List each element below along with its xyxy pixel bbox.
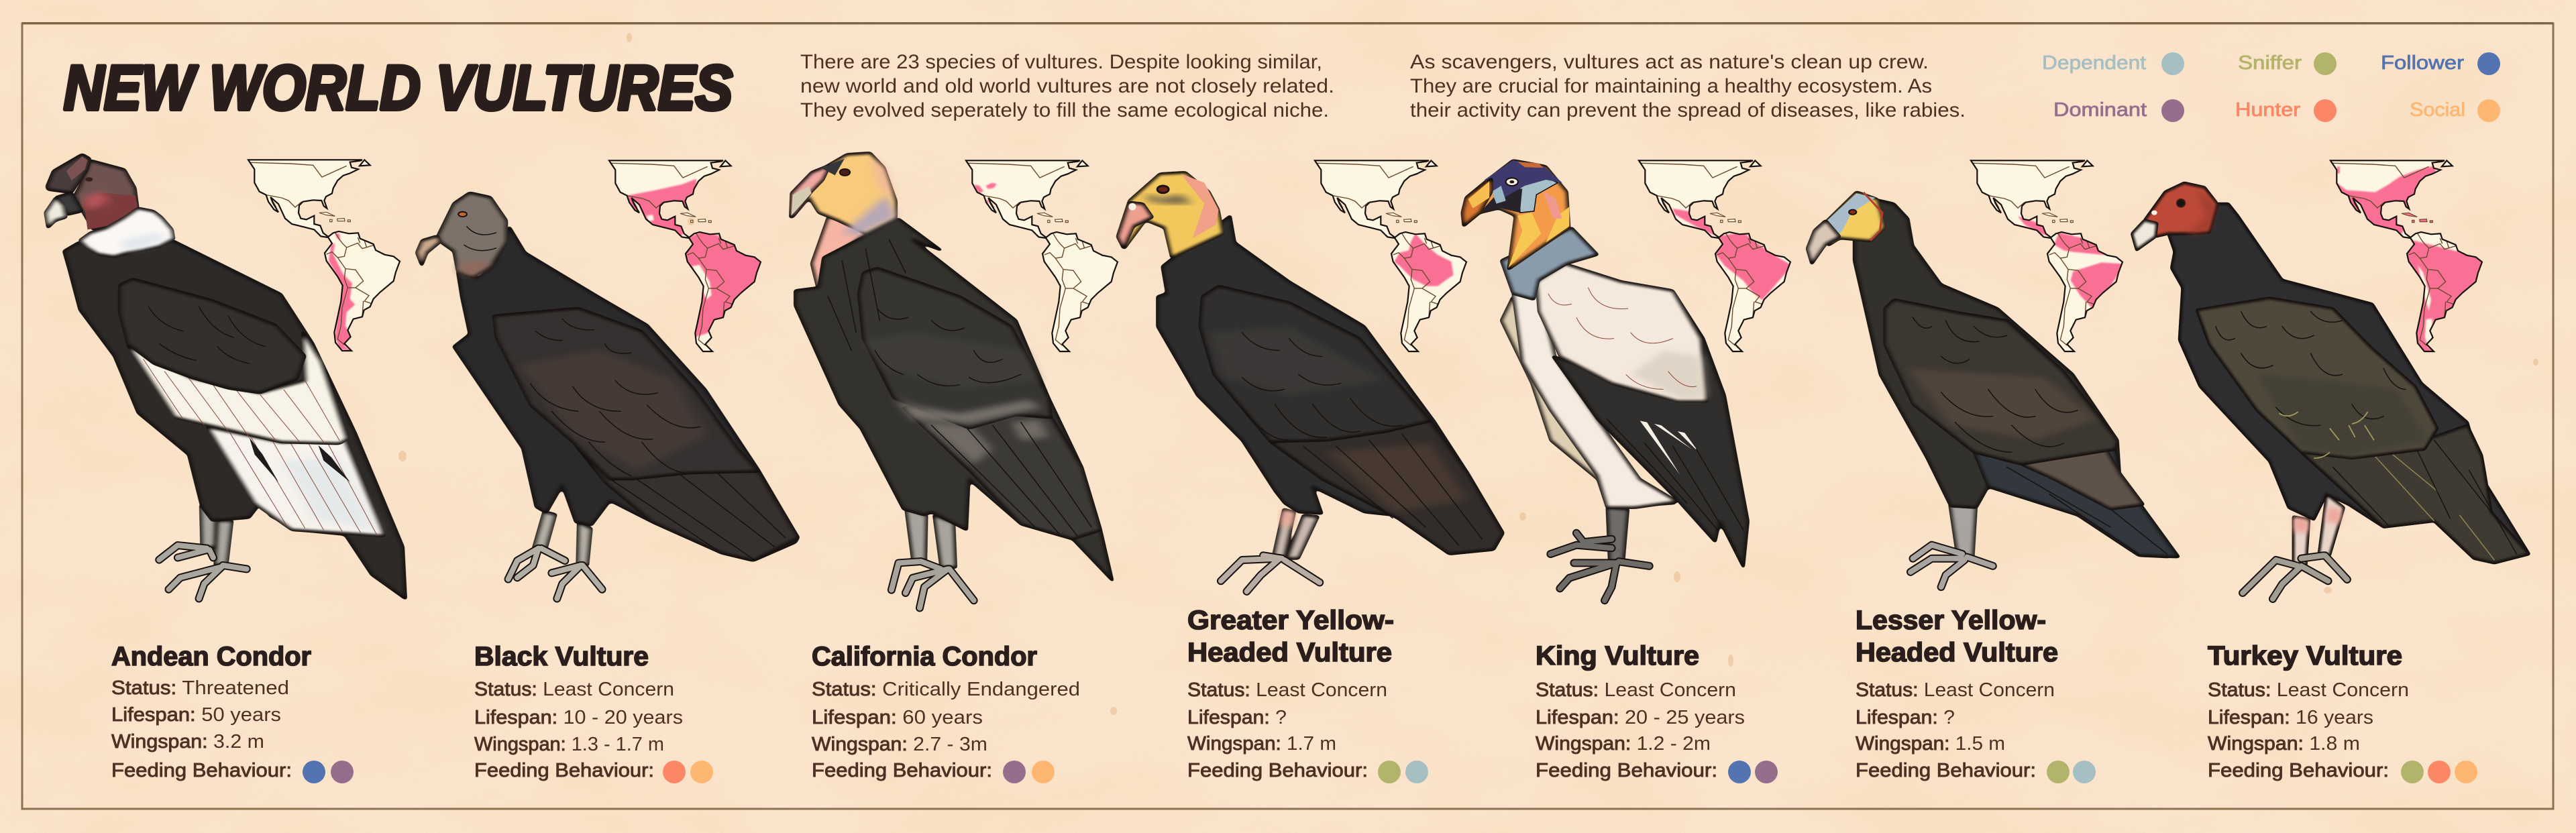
legs and feet	[892, 508, 974, 608]
head	[1807, 192, 1884, 264]
intro text: species: There are 23 species of vultures. Despite looking similar,	[800, 51, 1322, 73]
tan rear feathers	[1501, 296, 1675, 508]
card: California Condor: Status: Critically Endangered	[812, 679, 1080, 700]
card: Turkey Vulture	[2208, 641, 2477, 783]
legend: feeding behaviour: Dominant	[2053, 99, 2147, 121]
wing	[1199, 286, 1430, 442]
primaries	[2301, 425, 2529, 563]
white wing coverts	[1536, 264, 1707, 401]
card: California Condor: Feeding Behaviour:	[812, 760, 992, 781]
card: Greater Yellow-Headed Vulture: Lifespan: ?	[1187, 707, 1287, 728]
card: Andean Condor: Andean Condor	[111, 642, 311, 671]
card: Black Vulture	[474, 642, 713, 783]
card: Greater Yellow-Headed Vulture: Headed Vulture	[1187, 638, 1392, 667]
body silhouette	[1157, 216, 1503, 554]
legend: feeding behaviour	[2042, 52, 2500, 122]
neck quills	[828, 239, 906, 350]
card: Lesser Yellow-Headed Vulture: Lifespan: ?	[1856, 707, 1955, 728]
card: Lesser Yellow-Headed Vulture: Lesser Yellow-	[1856, 606, 2046, 635]
wing	[2197, 298, 2437, 458]
legend: feeding behaviour: Social	[2410, 99, 2465, 121]
title: NEW WORLD VULTURES	[64, 52, 733, 123]
card: Greater Yellow-Headed Vulture: Status: Least Concern	[1187, 679, 1387, 701]
legs and feet	[508, 512, 602, 598]
card: Lesser Yellow-Headed Vulture: Status: Least Concern	[1856, 679, 2055, 701]
legs and feet	[159, 505, 247, 598]
card: California Condor: California Condor	[812, 642, 1037, 671]
illustration: Lesser Yellow-headed Vulture	[1807, 192, 2179, 587]
legs and feet	[2243, 494, 2347, 599]
primaries	[1271, 421, 1503, 554]
illustration: King Vulture	[1462, 160, 1748, 600]
card: King Vulture: Wingspan: 1.2 - 2m	[1536, 733, 1711, 755]
lower white flight feathers	[207, 427, 384, 536]
card: Black Vulture: Black Vulture	[474, 642, 649, 671]
card: Lesser Yellow-Headed Vulture: Feeding Behaviour:	[1856, 760, 2036, 781]
card: King Vulture: Feeding Behaviour:	[1536, 760, 1717, 781]
white neck ruff	[80, 208, 174, 257]
card: Black Vulture: Wingspan: 1.3 - 1.7 m	[474, 734, 664, 755]
card: Lesser Yellow-Headed Vulture: Wingspan: 1.5 m	[1856, 733, 2005, 755]
card: Greater Yellow-Headed Vulture: Wingspan: 1.7 m	[1187, 733, 1336, 755]
intro text: species	[800, 51, 1334, 121]
body silhouette	[64, 240, 406, 599]
card: Turkey Vulture: Feeding Behaviour:	[2208, 760, 2389, 781]
head	[2132, 182, 2217, 250]
card: California Condor: Wingspan: 2.7 - 3m	[812, 734, 987, 755]
card: King Vulture: Lifespan: 20 - 25 years	[1536, 707, 1745, 728]
legend: feeding behaviour: Follower	[2381, 52, 2464, 74]
illustration: California Condor	[790, 153, 1113, 608]
head	[1118, 172, 1223, 258]
wing coverts	[859, 268, 1051, 429]
card: Andean Condor: Status: Threatened	[111, 677, 289, 699]
upper white secondary feathers	[127, 331, 347, 443]
card: Turkey Vulture: Status: Least Concern	[2208, 679, 2409, 701]
card: California Condor	[812, 642, 1080, 783]
card: Black Vulture: Feeding Behaviour:	[474, 760, 654, 781]
body silhouette	[1854, 195, 2179, 557]
intro text: scavengers	[1410, 51, 1966, 121]
card: King Vulture	[1536, 641, 1778, 783]
intro text: scavengers: They are crucial for maintaining a healthy ecosystem. As	[1410, 75, 1932, 97]
white body	[1513, 282, 1678, 508]
card: Black Vulture: Lifespan: 10 - 20 years	[474, 707, 683, 728]
intro text: species: new world and old world vultures are not closely related.	[800, 75, 1334, 97]
card: Turkey Vulture: Lifespan: 16 years	[2208, 707, 2373, 728]
card: King Vulture: King Vulture	[1536, 641, 1699, 671]
primaries blue grey and brown	[1974, 425, 2179, 557]
head and neck	[45, 154, 138, 229]
card: Turkey Vulture: Wingspan: 1.8 m	[2208, 733, 2360, 755]
map: Black Vulture range	[609, 160, 763, 351]
card: Andean Condor: Feeding Behaviour:	[111, 760, 292, 781]
card: Andean Condor: Lifespan: 50 years	[111, 704, 281, 726]
blue grey neck ruff	[1501, 227, 1597, 300]
illustration: Greater Yellow-headed Vulture	[1118, 172, 1503, 592]
card: Andean Condor: Wingspan: 3.2 m	[111, 731, 264, 753]
head	[417, 192, 506, 278]
body silhouette	[453, 227, 798, 561]
card: King Vulture: Status: Least Concern	[1536, 679, 1736, 701]
legend: feeding behaviour: Sniffer	[2238, 52, 2302, 74]
primaries	[573, 442, 798, 561]
card: Lesser Yellow-Headed Vulture: Headed Vulture	[1856, 638, 2058, 667]
map: King Vulture range	[1639, 160, 1792, 351]
illustration: Black Vulture	[417, 192, 798, 598]
map: Lesser Yellow-headed Vulture range	[1971, 160, 2124, 351]
wing coverts	[119, 279, 305, 393]
card: Black Vulture: Status: Least Concern	[474, 679, 674, 700]
illustration: Turkey Vulture	[2132, 182, 2529, 599]
legs and feet	[1911, 504, 1993, 587]
map: California Condor range	[966, 160, 1118, 351]
primaries	[903, 407, 1101, 539]
map: Greater Yellow-headed Vulture range	[1315, 160, 1466, 351]
illustration: Andean Condor	[45, 154, 406, 599]
legs and feet	[1550, 508, 1650, 600]
intro text: scavengers: their activity can prevent the spread of diseases, like rabies.	[1410, 99, 1966, 121]
card: Turkey Vulture: Turkey Vulture	[2208, 641, 2402, 671]
wing	[1884, 300, 2118, 464]
legs and feet	[1221, 509, 1320, 592]
body silhouette	[795, 219, 1113, 581]
head	[1462, 160, 1569, 270]
head	[790, 153, 896, 235]
wing	[493, 308, 759, 479]
map: Turkey Vulture range	[2330, 160, 2489, 355]
legend: feeding behaviour: Dependent	[2042, 52, 2146, 74]
card: Greater Yellow-Headed Vulture: Feeding Behaviour:	[1187, 760, 1368, 781]
black flight feathers	[1553, 290, 1748, 567]
card: Greater Yellow-Headed Vulture: Greater Yellow-	[1187, 606, 1394, 635]
legend: feeding behaviour: Hunter	[2235, 99, 2300, 121]
intro text: species: They evolved seperately to fill the same ecological niche.	[800, 99, 1329, 121]
body silhouette	[2168, 204, 2529, 563]
card: Lesser Yellow-Headed Vulture	[1856, 606, 2096, 783]
intro text: scavengers: As scavengers, vultures act as nature's clean up crew.	[1410, 51, 1929, 73]
card: Andean Condor	[111, 642, 354, 783]
neck skin	[812, 217, 896, 292]
map: Andean Condor range	[248, 160, 400, 351]
card: California Condor: Lifespan: 60 years	[812, 707, 983, 728]
card: Greater Yellow-Headed Vulture	[1187, 606, 1428, 783]
